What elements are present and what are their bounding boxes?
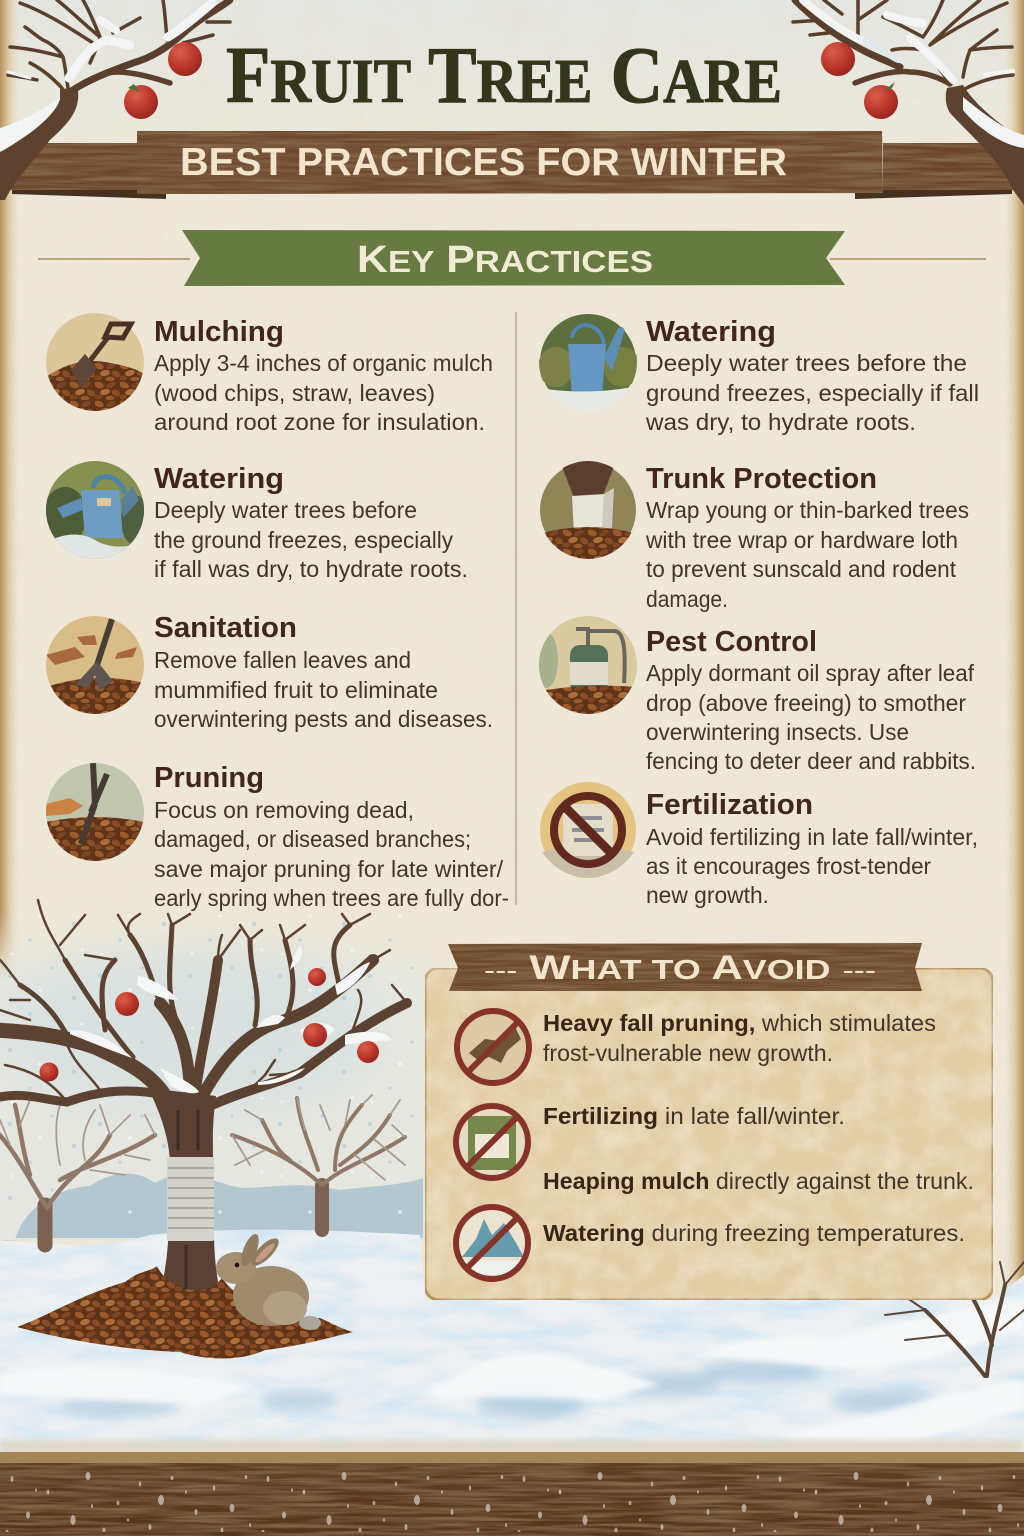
practice: pruning: damaged, or diseased branches; — [154, 826, 471, 852]
what to avoid heading: --- W HAT TO A VOID --- — [484, 949, 876, 987]
practice: sanitation: Sanitation — [154, 612, 297, 644]
practice: mulching: Mulching — [154, 316, 284, 348]
mulch pile — [17, 1266, 353, 1358]
avoid: heavy fall pruning — [457, 1010, 936, 1083]
avoid: watering — [456, 1207, 965, 1279]
practice: pest control: overwintering insects. Use — [646, 719, 909, 745]
practice: watering: was dry, to hydrate roots. — [645, 409, 916, 435]
practice: mulching: around root zone for insulation. — [154, 409, 485, 435]
practice: trunk protection — [539, 461, 969, 612]
practice: mulching — [46, 313, 493, 435]
apples — [40, 968, 379, 1082]
practice: sanitation: overwintering pests and diseases. — [154, 706, 493, 732]
practice: pruning: Pruning — [154, 762, 264, 794]
practice: watering: the ground freezes, especially — [154, 527, 453, 553]
practice: pest control: Pest Control — [646, 626, 817, 658]
wood banner: best practices for winter — [137, 131, 883, 194]
avoid: heavy fall pruning: Heavy fall pruning, which stimulates — [543, 1010, 936, 1036]
practice: pruning: early spring when trees are fully dor- — [154, 885, 509, 911]
practice: watering: if fall was dry, to hydrate roots. — [154, 556, 468, 582]
snow on branches — [70, 945, 392, 1093]
top left wood strip — [10, 143, 166, 199]
avoid: heavy fall pruning: frost-vulnerable new growth. — [543, 1040, 833, 1066]
practice: sanitation: Remove fallen leaves and — [154, 647, 411, 673]
practice: pruning: Focus on removing dead, — [154, 797, 414, 823]
distant treeline — [15, 1173, 423, 1240]
snow ground — [0, 1230, 1024, 1455]
panel: left practices — [43, 313, 509, 911]
top right apple branch — [793, 0, 1024, 205]
practice: watering: Deeply water trees before — [154, 497, 417, 523]
green banner: key practices — [38, 230, 986, 286]
top left apple branch — [0, 0, 230, 200]
background bare trees — [0, 1095, 405, 1245]
panel: what to avoid — [425, 943, 993, 1300]
avoid: watering: Watering during freezing temperatures. — [543, 1220, 965, 1246]
practice: trunk protection: damage. — [646, 586, 728, 612]
winter scene with snow ground — [0, 915, 1024, 1455]
small snowy tree bottom right — [885, 1262, 1024, 1376]
practice: fertilization: Fertilization — [646, 789, 813, 821]
practice: pruning — [46, 762, 509, 911]
top right wood strip — [855, 143, 1014, 199]
practice: watering: Watering — [646, 316, 776, 348]
practice: fertilization — [540, 782, 978, 908]
wood banner: best practices for winter: BEST PRACTICES FOR WINTER — [180, 141, 787, 184]
trunk wrap — [167, 1157, 214, 1241]
practice: fertilization: Avoid fertilizing in late fall/winter, — [646, 824, 978, 850]
practice: pest control: Apply dormant oil spray after leaf — [646, 660, 975, 686]
practice: pest control: fencing to deter deer and rabbits. — [646, 748, 976, 774]
practice: trunk protection: to prevent sunscald and rodent — [646, 556, 957, 582]
practice: watering: ground freezes, especially if fall — [646, 380, 979, 406]
avoid: fertilizing: Fertilizing in late fall/winter. — [543, 1103, 845, 1129]
practice: pruning: save major pruning for late winter/ — [154, 856, 504, 882]
avoid: fertilizing — [456, 1103, 845, 1178]
practice: watering — [43, 461, 468, 582]
panel: right practices — [534, 314, 979, 908]
green banner: key practices: KEY PRACTICES — [357, 239, 653, 281]
practice: sanitation: mummified fruit to eliminate — [154, 677, 438, 703]
avoid: heaping mulch: Heaping mulch directly against the trunk. — [543, 1168, 974, 1194]
practice: fertilization: new growth. — [646, 882, 769, 908]
practice: trunk protection: Wrap young or thin-barked trees — [646, 497, 969, 523]
practice: pest control: drop (above freeing) to smother — [646, 690, 966, 716]
practice: fertilization: as it encourages frost-tender — [646, 853, 931, 879]
practice: mulching: Apply 3-4 inches of organic mulch — [154, 350, 493, 376]
rabbit — [216, 1232, 321, 1330]
practice: pest control — [534, 616, 976, 774]
main apple tree — [0, 900, 407, 1300]
practice: trunk protection: Trunk Protection — [646, 463, 877, 495]
practice: watering: Deeply water trees before the — [646, 350, 967, 376]
column divider — [515, 312, 517, 905]
practice: mulching: (wood chips, straw, leaves) — [154, 380, 435, 406]
what to avoid heading — [448, 943, 922, 991]
practice: sanitation — [46, 612, 493, 732]
practice: trunk protection: with tree wrap or hardware loth — [645, 527, 958, 553]
practice: watering — [538, 314, 979, 435]
title: FRUIT TREE CARE — [226, 32, 782, 120]
bottom soil band with snow flecks — [0, 1452, 1024, 1536]
practice: watering: Watering — [154, 463, 284, 495]
